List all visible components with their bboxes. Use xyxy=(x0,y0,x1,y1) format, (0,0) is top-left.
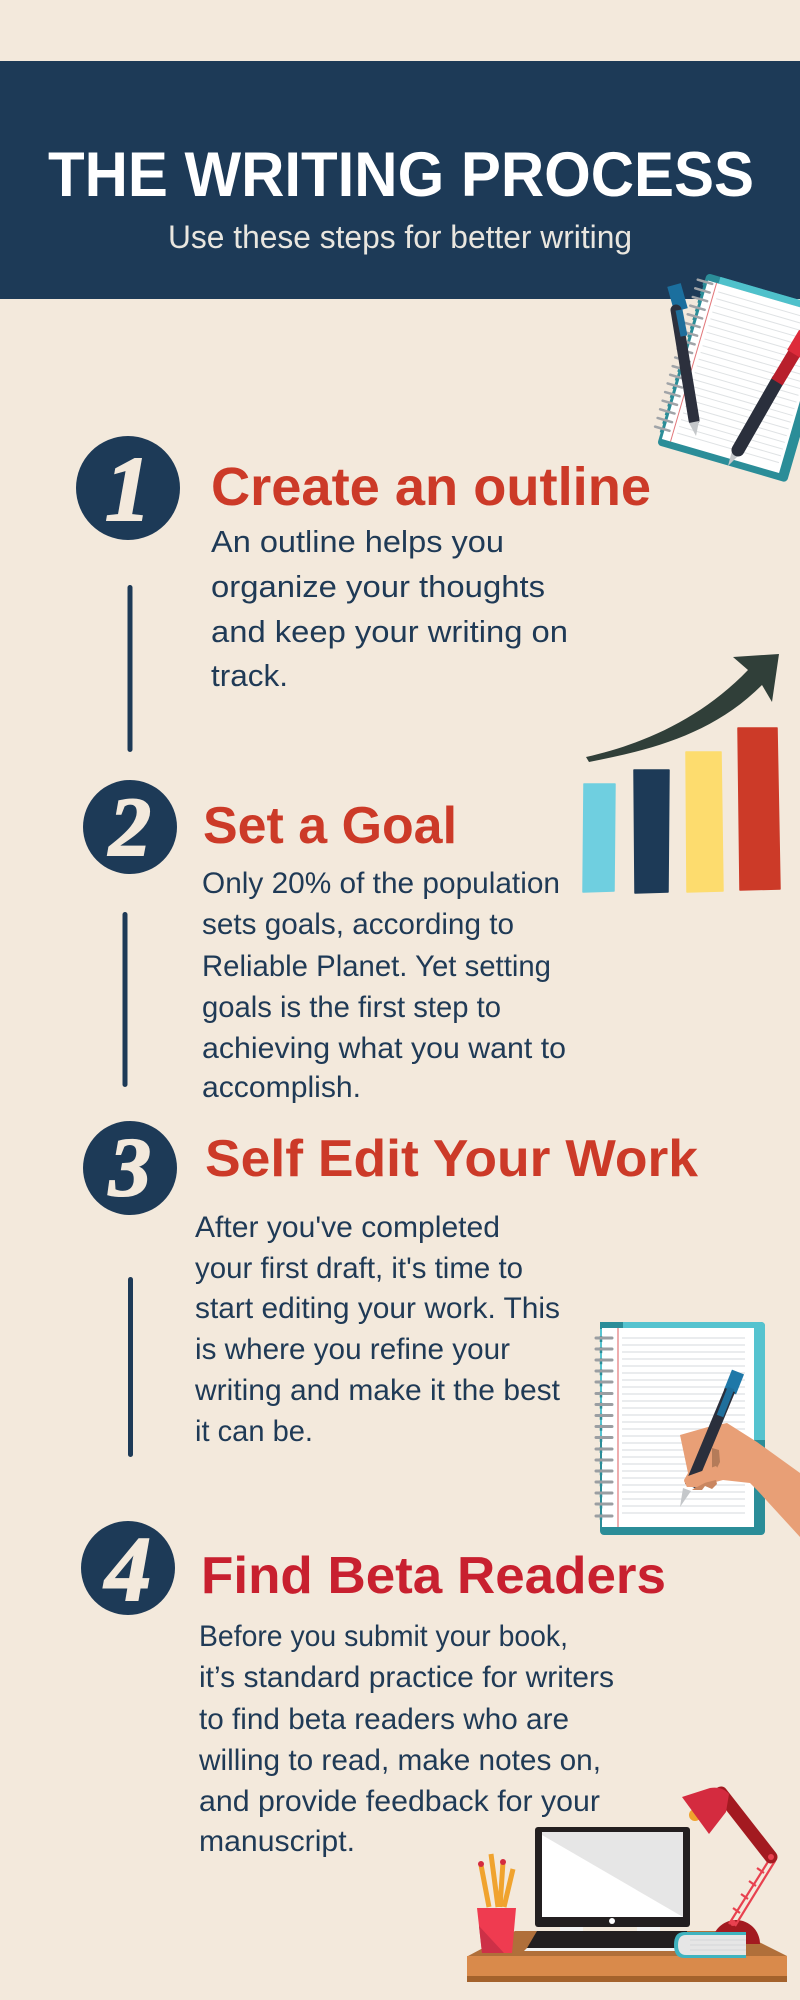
step 1 body text: track. xyxy=(211,658,288,693)
step 3 body text: is where you refine your xyxy=(195,1333,510,1366)
chart: rising bars with arrow xyxy=(583,654,780,893)
step 2 body text: goals is the first step to xyxy=(202,991,501,1024)
subtitle: Use these steps for better writing xyxy=(168,219,632,255)
step 4 heading: Find Beta Readers xyxy=(201,1547,666,1605)
step 2 body text: accomplish. xyxy=(202,1071,361,1104)
step 2 body text: achieving what you want to xyxy=(202,1032,566,1065)
illustration: desk with laptop, lamp, pencils and book xyxy=(467,1788,787,1982)
step 1 heading: Create an outline xyxy=(211,457,651,517)
step 4 body text: Before you submit your book, xyxy=(199,1620,568,1653)
pen xyxy=(730,1372,738,1392)
icon: notebook with hand writing xyxy=(596,1322,800,1537)
step 4 number badge: 4 xyxy=(103,1518,151,1620)
step 1 body text: An outline helps you xyxy=(211,524,504,559)
step 4 body text: to find beta readers who are xyxy=(199,1703,569,1736)
title: THE WRITING PROCESS xyxy=(48,140,754,210)
arrow xyxy=(586,654,779,762)
step 3 body text: writing and make it the best xyxy=(194,1374,560,1407)
step 4 body text: it’s standard practice for writers xyxy=(199,1661,614,1694)
desk xyxy=(467,1931,787,1982)
connector line 1 xyxy=(128,585,132,752)
step 4 body text: willing to read, make notes on, xyxy=(198,1744,601,1777)
step 3 body text xyxy=(194,1211,560,1448)
step 3 number badge xyxy=(83,1121,177,1215)
book xyxy=(674,1932,746,1958)
step 3 heading: Self Edit Your Work xyxy=(205,1130,698,1188)
step 1 number badge: 1 xyxy=(105,438,151,540)
step 1 body text xyxy=(211,524,568,693)
step 2 body text: sets goals, according to xyxy=(202,908,514,941)
connector line 3 xyxy=(128,1277,133,1457)
laptop xyxy=(524,1827,690,1951)
step 2 number badge xyxy=(83,780,177,874)
step 1 body text: and keep your writing on xyxy=(211,614,568,649)
step 4 body text: manuscript. xyxy=(199,1825,355,1858)
step 2 heading: Set a Goal xyxy=(203,797,457,855)
step 4 body text xyxy=(198,1620,614,1858)
pencils in cup xyxy=(477,1854,516,1953)
icon: notebook with two pens xyxy=(650,271,800,483)
header banner xyxy=(0,61,800,299)
step 2 body text: Reliable Planet. Yet setting xyxy=(202,950,551,983)
step 3 number badge: 3 xyxy=(108,1121,151,1214)
hand xyxy=(680,1423,800,1537)
step 3 body text: your first draft, it's time to xyxy=(195,1252,523,1285)
step 1 body text: organize your thoughts xyxy=(211,569,545,604)
lamp xyxy=(682,1788,775,1944)
step 3 body text: start editing your work. This xyxy=(195,1292,560,1325)
step 2 body text xyxy=(202,867,566,1104)
step 4 number badge xyxy=(81,1518,175,1620)
connector line 2 xyxy=(122,912,128,1087)
step 3 body text: it can be. xyxy=(195,1415,313,1448)
step 1 number badge xyxy=(76,436,180,540)
step 2 body text: Only 20% of the population xyxy=(202,867,560,900)
step 2 number badge: 2 xyxy=(107,781,151,874)
step 3 body text: After you've completed xyxy=(195,1211,500,1244)
step 4 body text: and provide feedback for your xyxy=(199,1785,600,1818)
